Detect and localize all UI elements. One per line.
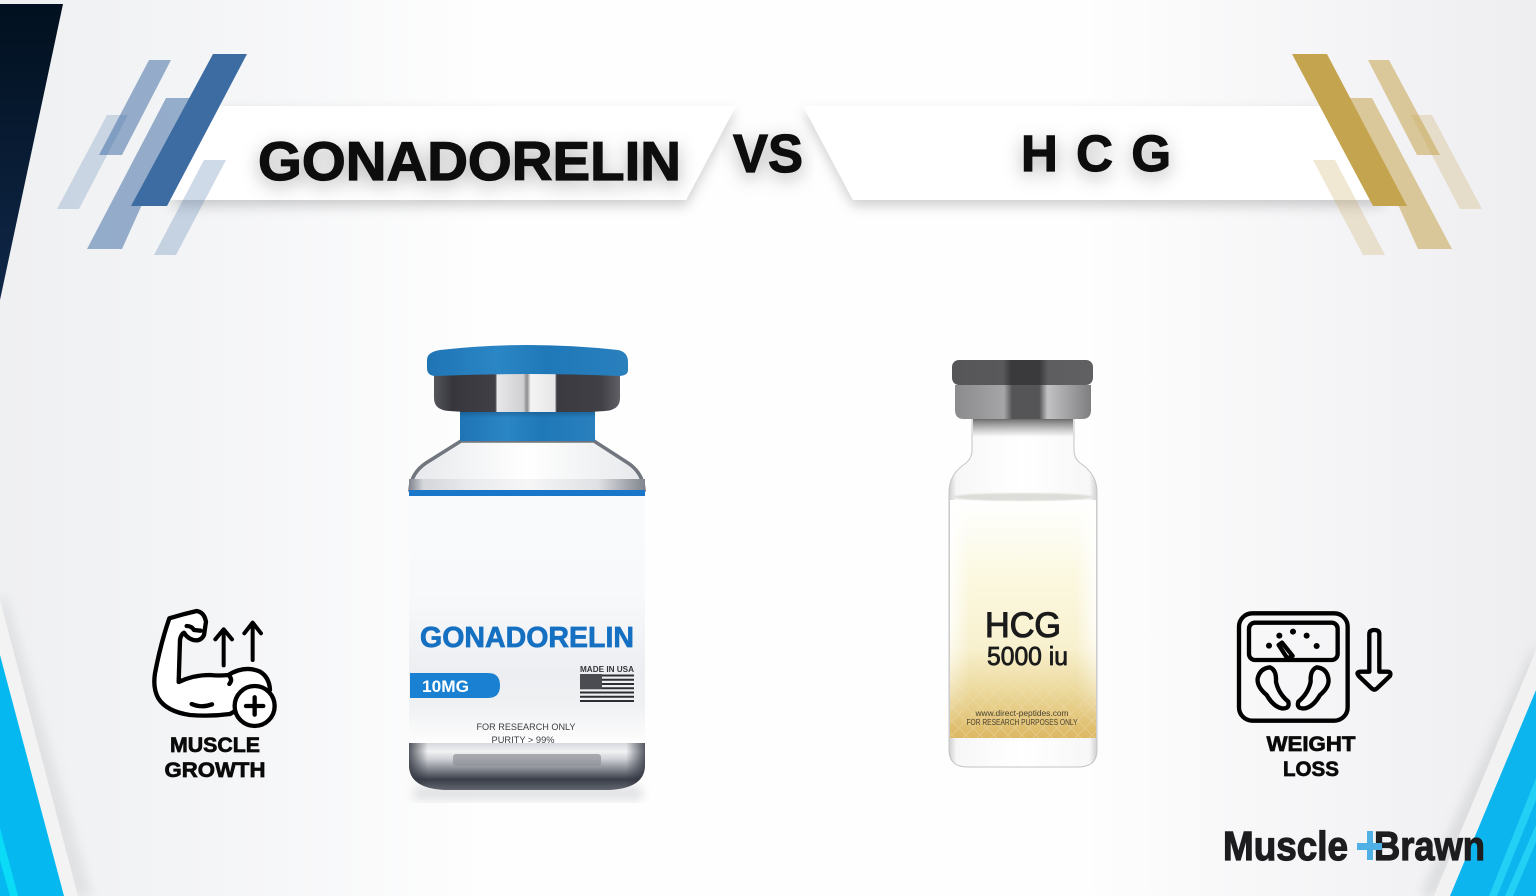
base highlight (453, 754, 601, 766)
label: muscle growth: MUSCLE (170, 734, 260, 757)
crimp cap upper (952, 360, 1093, 385)
vial text: name: GONADORELIN (420, 622, 634, 654)
scale body (1239, 613, 1348, 721)
flag: made in usa (580, 665, 634, 701)
neck band shade (460, 408, 595, 441)
vial text: url: www.direct-peptides.com (974, 709, 1069, 718)
left foot (1258, 667, 1289, 708)
label stripe (409, 490, 645, 496)
dose pill: 10MG (422, 677, 469, 696)
title banner: left (57, 54, 736, 255)
vial: gonadorelin (409, 345, 645, 800)
dial dots (1266, 629, 1320, 649)
corner accent: cyan bottom-left (0, 596, 92, 896)
arm details (187, 626, 231, 706)
arrow up two (244, 623, 261, 660)
liquid line (953, 493, 1093, 501)
logo word muscle: Muscle (1223, 823, 1348, 869)
logo word brawn: Brawn (1374, 823, 1485, 869)
label: weight loss (1266, 733, 1356, 781)
vial shadow (414, 786, 642, 800)
banner shape left (170, 106, 736, 200)
title banner: right (803, 54, 1482, 255)
dial needle (1279, 643, 1293, 658)
corner accent: navy top-left (0, 4, 63, 300)
corner accent: cyan bottom-right (1420, 640, 1536, 896)
crimp cap lower (955, 385, 1091, 419)
right foot (1298, 667, 1329, 708)
decorative bars: blue (57, 54, 247, 255)
vial text: dose: 5000 iu (987, 641, 1068, 671)
neck band (460, 408, 595, 441)
label: weight loss: LOSS (1283, 758, 1339, 781)
vial text: research: FOR RESEARCH ONLY (476, 722, 576, 733)
arrow down (1357, 630, 1390, 690)
dial window (1249, 623, 1338, 660)
glass rim band (409, 479, 645, 490)
icon: muscle growth (154, 611, 275, 726)
heading: GONADORELIN: GONADORELIN (258, 130, 681, 192)
decorative bars: gold (1292, 54, 1482, 255)
label pattern (950, 680, 1096, 738)
vial glass shoulder (410, 441, 644, 490)
logo plus (1357, 831, 1382, 860)
vial text: research: FOR RESEARCH PURPOSES ONLY (966, 718, 1078, 727)
base side shading (409, 742, 645, 790)
label side fade (950, 525, 1096, 718)
plus badge (235, 686, 275, 726)
icon: weight scale (1239, 613, 1390, 721)
heading: VS: VS (733, 124, 803, 184)
yellow label (950, 500, 1096, 738)
crimp ring (434, 372, 620, 412)
vial glass (949, 419, 1097, 767)
flag: made in usa: MADE IN USA (580, 665, 634, 674)
vial: hcg (949, 360, 1097, 767)
heading: HCG: H C G (1021, 125, 1171, 182)
arm outline (154, 611, 270, 716)
arrow up one (215, 629, 232, 665)
banner shape right (803, 106, 1385, 200)
vial text: HCG: HCG (985, 606, 1061, 645)
label: weight loss: WEIGHT (1266, 733, 1356, 756)
neck shading (973, 419, 1073, 437)
vial text: purity: PURITY > 99% (492, 735, 555, 746)
vial label (409, 496, 645, 743)
logo: muscle brawn (1223, 823, 1485, 869)
dose pill (410, 673, 500, 698)
blue cap (427, 345, 628, 376)
label: muscle growth: GROWTH (164, 759, 266, 782)
label: muscle growth (164, 734, 266, 782)
vial base (409, 742, 645, 790)
